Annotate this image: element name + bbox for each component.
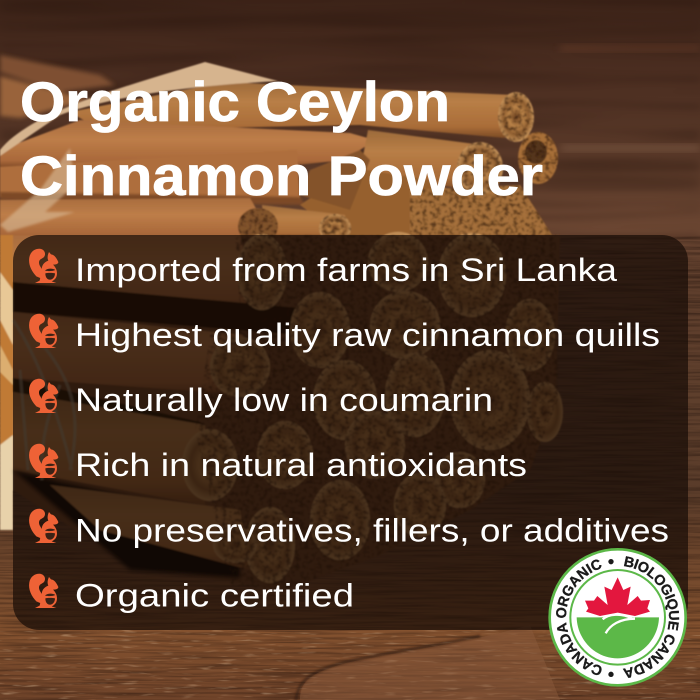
grey straw strands	[13, 320, 75, 480]
cinnamon quill bundle	[0, 55, 563, 590]
title: Organic Ceylon	[20, 70, 450, 133]
right quills	[360, 130, 490, 190]
lowest top quill	[0, 198, 272, 240]
icon: squirrel	[29, 379, 58, 413]
benefit: organic	[29, 574, 354, 614]
badge: Canada Organic seal	[548, 548, 687, 687]
lower pile base	[13, 235, 560, 590]
benefit: imported: Imported from farms in Sri Lanka	[75, 252, 617, 288]
benefit: organic: Organic certified	[75, 578, 354, 614]
icon: squirrel	[29, 509, 58, 543]
quill ends	[182, 232, 563, 583]
icon: squirrel	[29, 574, 58, 608]
benefit: quality: Highest quality raw cinnamon quills	[75, 317, 660, 353]
icon: squirrel	[29, 444, 58, 478]
straw wrap	[0, 62, 278, 156]
far blurred quills	[0, 55, 115, 118]
badge: Canada Organic seal: BIOLOGIQUE CANADA	[622, 556, 680, 678]
left edge straw and quill	[0, 235, 13, 530]
benefit: low coumarin: Naturally low in coumarin	[75, 382, 493, 418]
title: Cinnamon Powder	[20, 144, 543, 207]
upper quill	[70, 82, 515, 138]
benefit: antioxidants: Rich in natural antioxidants	[75, 447, 527, 483]
lower pile left quills	[13, 235, 262, 310]
badge: Canada Organic seal: CANADA ORGANIC	[556, 560, 602, 676]
icon: squirrel	[29, 249, 58, 283]
second quill	[0, 120, 375, 168]
title	[20, 70, 543, 207]
icon: squirrel	[29, 314, 58, 348]
benefit: no additives: No preservatives, fillers, or additives	[75, 512, 669, 548]
panel: benefits list backdrop	[13, 235, 688, 630]
